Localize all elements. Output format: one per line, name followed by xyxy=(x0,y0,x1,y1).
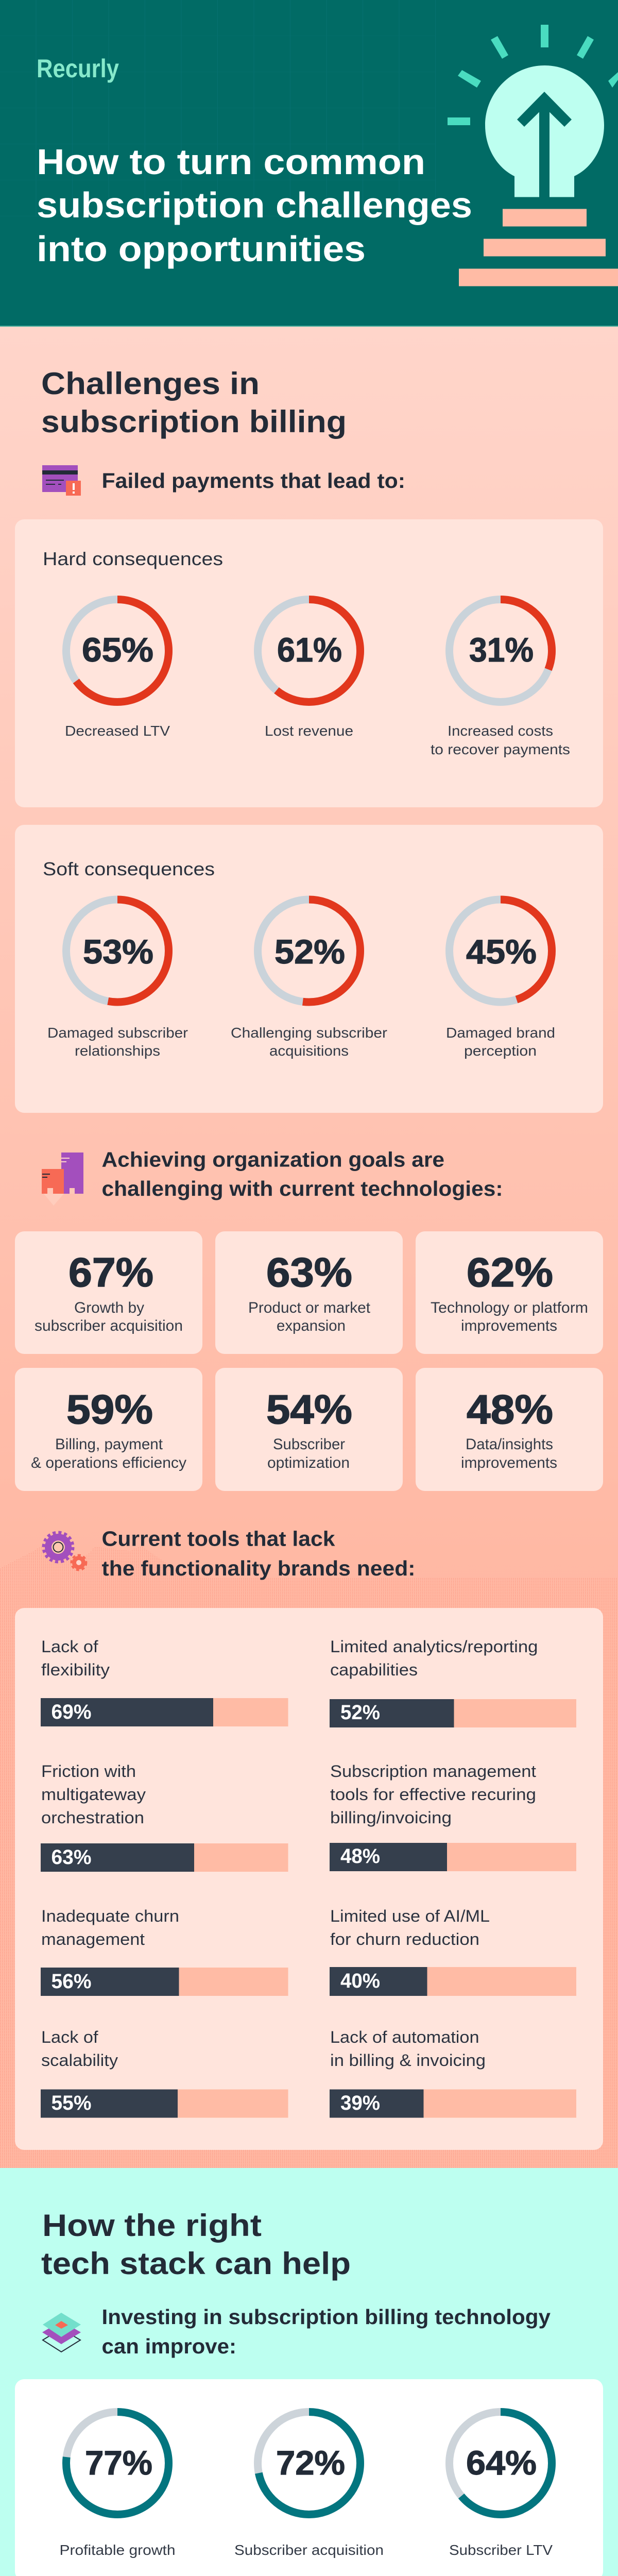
donut: 52% challenging acquisitions: 52% xyxy=(274,933,345,971)
bar: limited analytics 52%: 52% xyxy=(340,1701,380,1724)
bar: scalability 55%: Lack of xyxy=(41,2028,98,2046)
donut: 61% lost revenue xyxy=(258,600,360,739)
bar: automation 39%: in billing & invoicing xyxy=(330,2051,486,2070)
bar: limited analytics 52%: Limited analytics/reporting xyxy=(330,1637,538,1656)
bar: churn management 56%: Inadequate churn xyxy=(41,1907,179,1925)
stat card: 59%: 59% xyxy=(66,1386,153,1432)
stat card: 63%: Product or market xyxy=(248,1299,371,1316)
stat card: 63%: 63% xyxy=(266,1249,352,1295)
subheading: investing: Investing in subscription billing technology xyxy=(102,2305,551,2329)
subheading: current tools xyxy=(102,1527,415,1580)
donut: 52% challenging acquisitions: Challenging subscriber xyxy=(231,1025,387,1041)
donut: 72% subscriber acquisition: Subscriber acquisition xyxy=(234,2542,384,2558)
bar: friction 63%: Friction with xyxy=(41,1762,136,1781)
donut: 45% damaged brand: perception xyxy=(464,1043,537,1059)
stat card: 48% xyxy=(416,1368,603,1491)
section heading: challenges: Challenges in xyxy=(41,366,260,401)
donut: 45% damaged brand: Damaged brand xyxy=(446,1025,555,1041)
section heading: tech stack: tech stack can help xyxy=(41,2246,351,2281)
subheading: organization goals: Achieving organization goals are xyxy=(102,1148,444,1172)
panel: improvements xyxy=(15,2379,603,2576)
bar: automation 39%: Lack of automation xyxy=(330,2028,479,2046)
donut: 77% profitable growth: 77% xyxy=(85,2444,152,2482)
bar: friction 63%: orchestration xyxy=(41,1808,144,1827)
subheading: failed payments: Failed payments that lead to: xyxy=(102,469,405,493)
donut: 65% decreased LTV: Decreased LTV xyxy=(65,723,170,739)
donut: 31% increased costs: 31% xyxy=(469,631,534,669)
bar: automation 39%: 39% xyxy=(340,2092,380,2114)
title: into opportunities xyxy=(37,229,366,269)
bar: lack of flexibility 69%: Lack of xyxy=(41,1637,98,1656)
donut: 53% damaged relationships: 53% xyxy=(83,933,153,971)
subheading: investing: can improve: xyxy=(102,2334,236,2358)
section heading: challenges xyxy=(41,366,347,439)
tech stack section background xyxy=(0,2168,618,2576)
donut: 61% lost revenue: Lost revenue xyxy=(265,723,353,739)
stat card: 54% xyxy=(215,1368,403,1491)
donut: 53% damaged relationships: Damaged subscriber xyxy=(47,1025,188,1041)
stat card: 54%: optimization xyxy=(267,1454,350,1471)
stat card: 48%: 48% xyxy=(467,1386,553,1432)
donut: 53% damaged relationships: relationships xyxy=(75,1043,160,1059)
donut: 72% subscriber acquisition xyxy=(234,2412,384,2558)
title: subscription challenges xyxy=(37,185,472,225)
title: How to turn common xyxy=(37,142,425,182)
stat card: 67%: subscriber acquisition xyxy=(35,1317,183,1334)
stat card: 63% xyxy=(215,1231,403,1354)
bar: subscription management 48%: tools for effective recuring xyxy=(330,1785,536,1804)
donut: 61% lost revenue: 61% xyxy=(277,631,342,669)
bar: subscription management 48%: billing/invoicing xyxy=(330,1808,452,1827)
icon: buildings xyxy=(42,1153,83,1206)
challenges section background xyxy=(0,327,618,2168)
donut: 72% subscriber acquisition: 72% xyxy=(276,2444,345,2482)
bar: churn management 56%: 56% xyxy=(52,1970,92,1993)
icon: light bulb with up arrow on steps xyxy=(448,25,618,286)
bar: scalability 55%: scalability xyxy=(41,2051,118,2070)
stat card: 59%: Billing, payment xyxy=(55,1436,163,1453)
bar: friction 63% xyxy=(41,1762,288,1872)
icon: layers xyxy=(42,2313,81,2352)
donut: 31% increased costs xyxy=(431,600,570,757)
bar: subscription management 48%: Subscription management xyxy=(330,1762,536,1781)
stat card: 67% xyxy=(15,1231,202,1354)
icon: failed credit card xyxy=(42,465,81,496)
stat card: 62%: improvements xyxy=(461,1317,557,1334)
bar: AI/ML 40%: for churn reduction xyxy=(330,1930,479,1948)
stat card: 62%: Technology or platform xyxy=(431,1299,588,1316)
donut: 64% subscriber LTV: 64% xyxy=(466,2444,537,2482)
stat card: 67%: 67% xyxy=(68,1249,153,1295)
donut: 52% challenging acquisitions xyxy=(231,900,387,1059)
logo: Recurly: Recurly xyxy=(37,54,119,83)
bar: automation 39% xyxy=(330,2028,576,2117)
bar: friction 63%: multigateway xyxy=(41,1785,146,1804)
bar: friction 63%: 63% xyxy=(52,1846,92,1869)
donut: 31% increased costs: Increased costs xyxy=(448,723,553,739)
section heading: challenges: subscription billing xyxy=(41,404,347,439)
header band xyxy=(0,0,618,327)
section heading: tech stack xyxy=(41,2208,351,2281)
subheading: organization goals xyxy=(102,1148,503,1200)
stat card: 54%: Subscriber xyxy=(273,1436,345,1453)
title xyxy=(37,142,472,269)
panel heading: Hard consequences xyxy=(43,548,223,569)
stat card: 59% xyxy=(15,1368,202,1491)
subheading: current tools: the functionality brands need: xyxy=(102,1556,415,1580)
donut: 77% profitable growth xyxy=(60,2412,175,2558)
donut: 64% subscriber LTV xyxy=(449,2412,553,2558)
stat card: 62%: 62% xyxy=(467,1249,553,1295)
donut: 65% decreased LTV: 65% xyxy=(82,631,153,669)
bar: lack of flexibility 69%: 69% xyxy=(52,1701,92,1723)
donut: 31% increased costs: to recover payments xyxy=(431,741,570,757)
subheading: investing xyxy=(102,2305,551,2358)
donut: 45% damaged brand: 45% xyxy=(466,933,537,971)
icon: gears xyxy=(43,1532,87,1570)
bar: churn management 56% xyxy=(41,1907,288,1996)
stat card: 54%: 54% xyxy=(266,1386,352,1432)
donut: 64% subscriber LTV: Subscriber LTV xyxy=(449,2542,553,2558)
donut: 65% decreased LTV xyxy=(65,600,170,739)
bar: AI/ML 40%: 40% xyxy=(340,1970,380,1992)
bar: subscription management 48% xyxy=(330,1762,576,1871)
donut: 52% challenging acquisitions: acquisitions xyxy=(269,1043,349,1059)
panel heading: Soft consequences xyxy=(43,858,215,879)
bar: subscription management 48%: 48% xyxy=(340,1845,380,1868)
donut: 77% profitable growth: Profitable growth xyxy=(60,2542,175,2558)
stat card: 63%: expansion xyxy=(277,1317,346,1334)
bar: churn management 56%: management xyxy=(41,1930,145,1948)
donut: 53% damaged relationships xyxy=(47,900,188,1059)
subheading: current tools: Current tools that lack xyxy=(102,1527,335,1551)
panel: tools bar chart xyxy=(15,1608,603,2150)
bar: scalability 55%: 55% xyxy=(52,2092,92,2114)
stat card: 59%: & operations efficiency xyxy=(31,1454,186,1471)
panel: hard consequences xyxy=(15,519,603,807)
stat card: 67%: Growth by xyxy=(74,1299,144,1316)
bar: scalability 55% xyxy=(41,2028,288,2117)
donut: 45% damaged brand xyxy=(446,900,555,1059)
bar: lack of flexibility 69% xyxy=(41,1637,288,1726)
bar: limited analytics 52% xyxy=(330,1637,576,1727)
bar: lack of flexibility 69%: flexibility xyxy=(41,1660,110,1679)
bar: AI/ML 40% xyxy=(330,1907,576,1996)
subheading: organization goals: challenging with current technologies: xyxy=(102,1177,503,1200)
bar: AI/ML 40%: Limited use of AI/ML xyxy=(330,1907,490,1925)
stat card: 62% xyxy=(416,1231,603,1354)
stat card: 48%: improvements xyxy=(461,1454,557,1471)
stat card: 48%: Data/insights xyxy=(466,1436,553,1453)
bar: limited analytics 52%: capabilities xyxy=(330,1660,418,1679)
section heading: tech stack: How the right xyxy=(42,2208,262,2243)
panel: soft consequences xyxy=(15,825,603,1113)
